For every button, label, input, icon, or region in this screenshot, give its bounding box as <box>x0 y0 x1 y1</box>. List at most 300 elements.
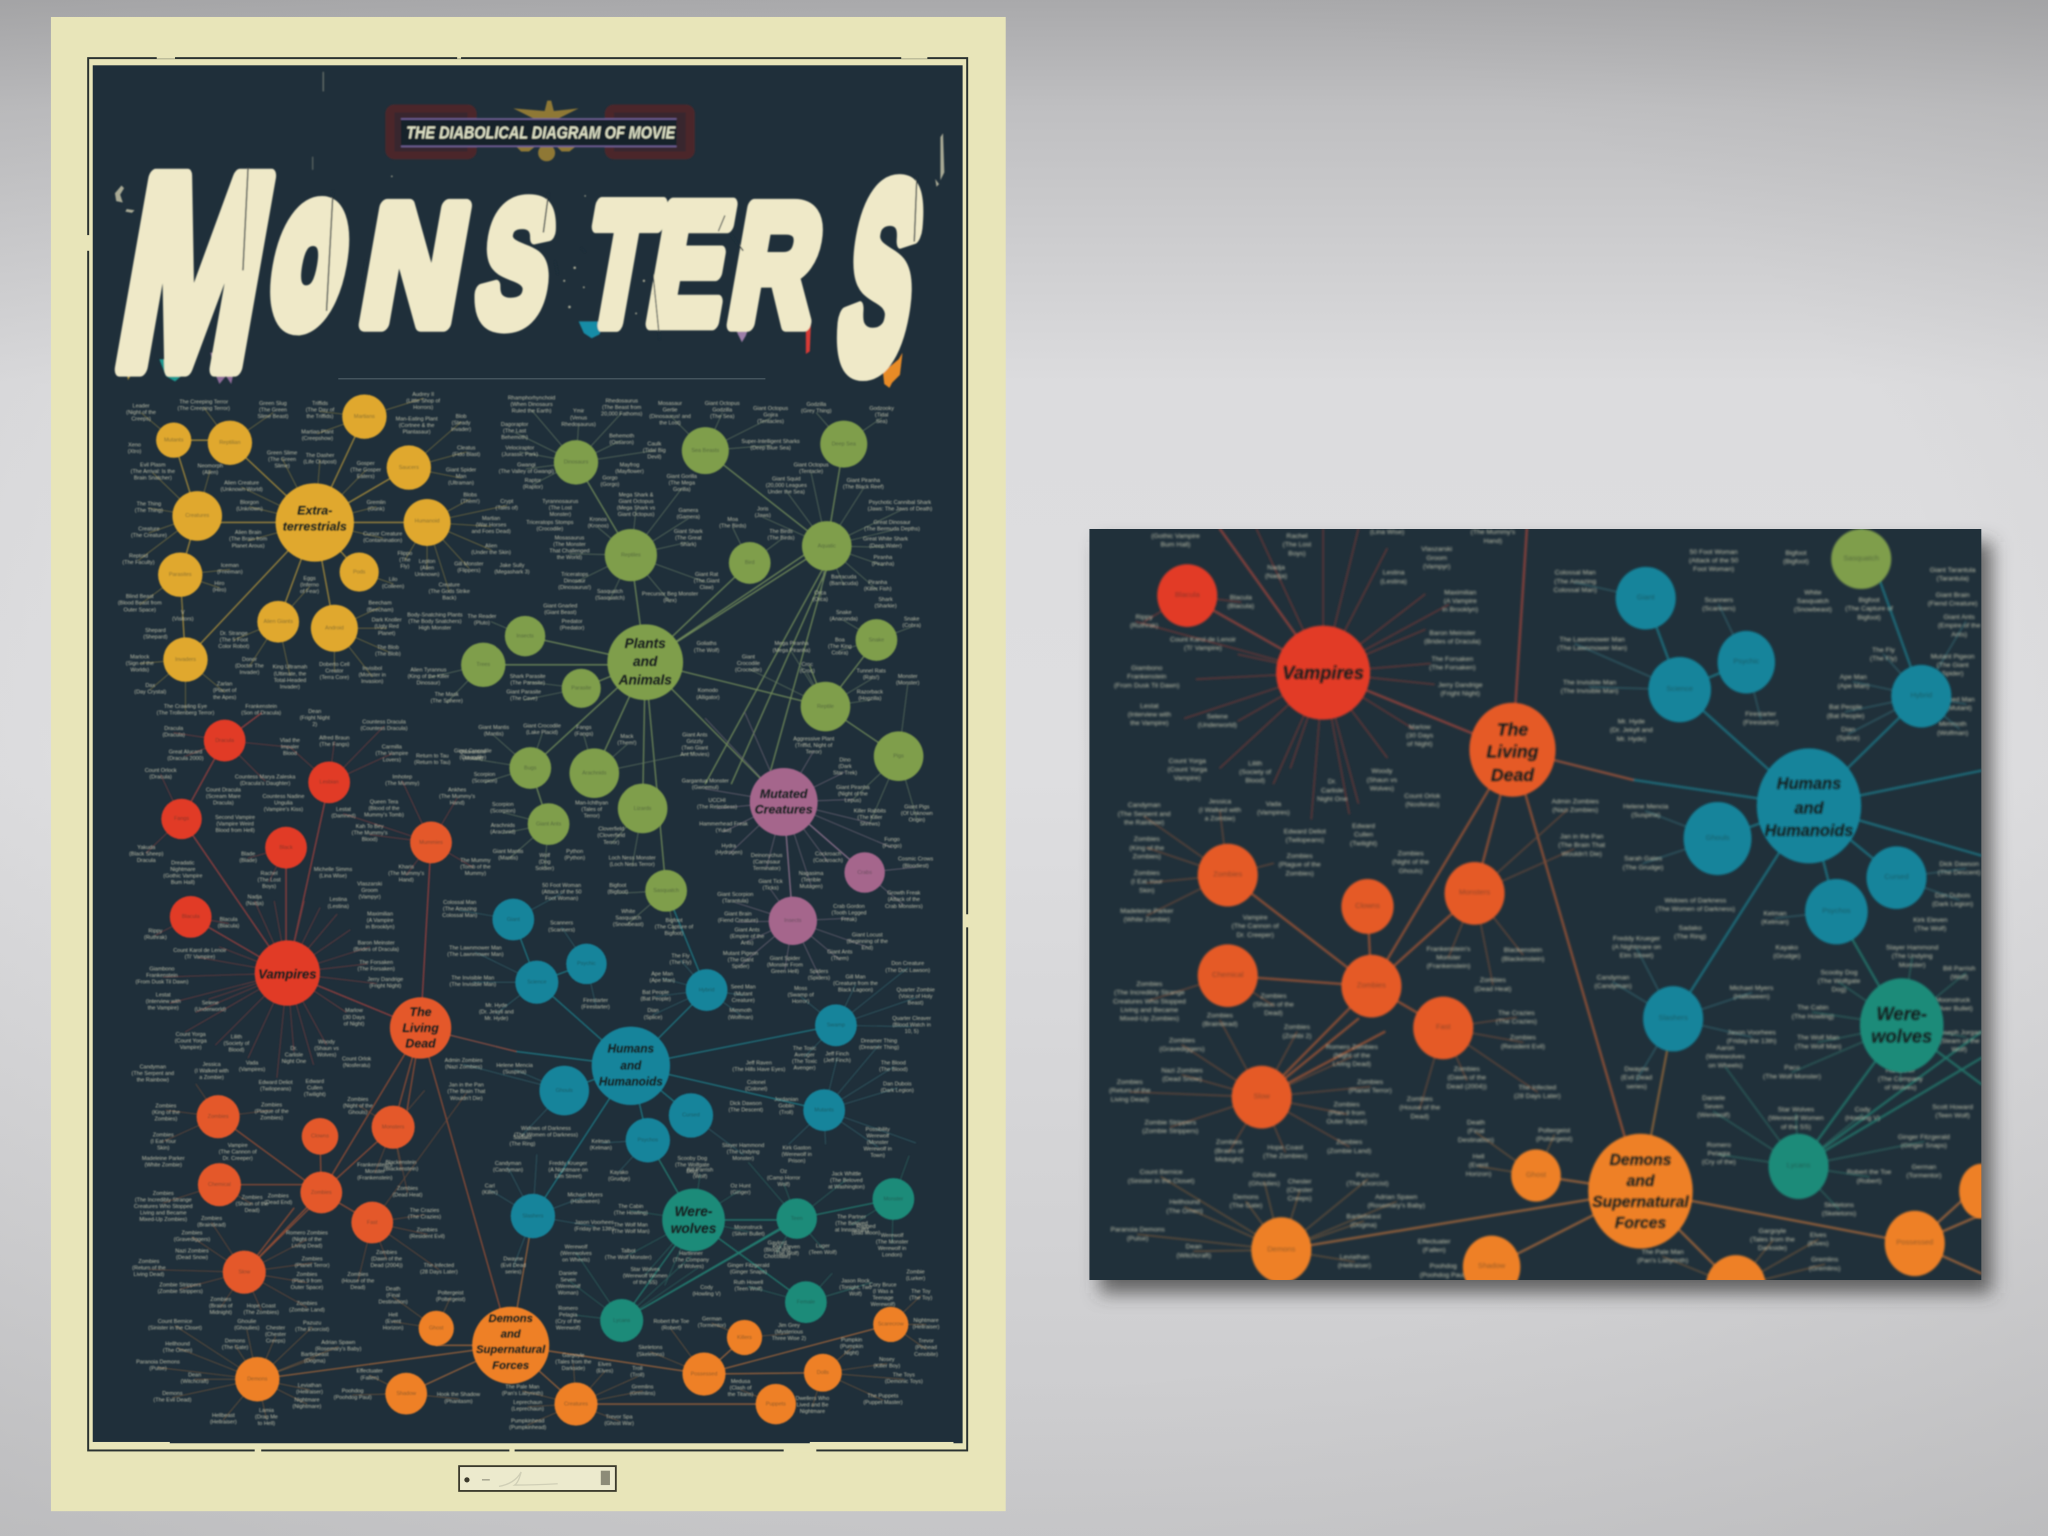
labels: plants and animals: Giant Spider <box>770 956 800 962</box>
detail labels: Zombies <box>1207 1012 1233 1019</box>
labels: plants and animals: (Croc) <box>800 669 815 675</box>
detail labels: Hellhound <box>1169 1199 1200 1206</box>
detail links: living dead <box>1129 788 1627 1153</box>
labels: plants and animals: (The Cave) <box>510 696 538 702</box>
labels: werewolves: (Werewolf Women <box>623 1273 668 1279</box>
labels: demons and supernatural forces: (Hellraiser) <box>296 1390 323 1396</box>
labels: werewolves: Daniele <box>559 1271 577 1277</box>
hub title: demons and supernatural forces <box>476 1313 546 1372</box>
labels: extra-terrestrials: (Cortnee & the <box>399 423 434 429</box>
labels: living dead: Zombies <box>296 1301 317 1307</box>
labels: vampires: Maximilian <box>367 912 393 918</box>
labels: vampires: Frankenstein <box>245 704 277 710</box>
labels: demons and supernatural forces: (Elves) <box>596 1369 613 1375</box>
labels: vampires: (The Mummy's <box>439 794 475 800</box>
labels: humans and humanoids: (Halloween) <box>571 1199 600 1205</box>
labels: humans and humanoids: (Creature from the <box>833 981 878 987</box>
detail labels: (I Walked with <box>1199 807 1241 814</box>
detail hub titles: Vampires <box>1282 662 1364 683</box>
labels: werewolves: Romero <box>558 1306 578 1312</box>
labels: plants and animals: Cloverfield <box>598 827 624 833</box>
labels: living dead: Zombies <box>268 1194 289 1200</box>
labels: humans and humanoids: Freddy Krueger <box>549 1161 587 1167</box>
detail labels: Candyman <box>1597 975 1629 982</box>
labels: living dead: Zombies) <box>154 1117 177 1123</box>
labels: extra-terrestrials: Donor <box>242 657 257 663</box>
labels: vampires: (Vampire Weird <box>216 821 254 827</box>
detail nodes: humans and humanoids: Giant <box>1637 593 1656 602</box>
detail labels: Sadako <box>1679 925 1702 932</box>
detail labels: (Society of <box>1239 769 1271 776</box>
nodes: werewolves: Lycans <box>613 1318 631 1324</box>
detail labels: (Zombie Land) <box>1327 1148 1371 1155</box>
title letters: O <box>263 181 356 349</box>
labels: humans and humanoids: Jeff Finch <box>825 1051 849 1057</box>
labels: plants and animals: Fungo <box>884 837 900 843</box>
labels: living dead: Ghouls) <box>348 1110 368 1116</box>
detail hub titles: wolves <box>1871 1025 1932 1046</box>
labels: plants and animals: Hammerhead Freak <box>699 821 748 827</box>
labels: humans and humanoids: (Scanners) <box>548 927 575 933</box>
labels: werewolves: at Innsmouth) <box>835 1228 868 1234</box>
labels: plants and animals: Scorpion <box>474 772 495 778</box>
links: werewolves <box>568 1140 909 1320</box>
nodes: werewolves <box>600 1178 914 1342</box>
nodes: extra-terrestrials: Mutants <box>164 437 184 443</box>
labels: extra-terrestrials: Reptoid <box>129 554 148 560</box>
labels: humans and humanoids: (Attack of the 50 <box>542 889 582 895</box>
labels: plants and animals: (Bigfoot) <box>607 889 628 895</box>
nodes: extra-terrestrials: Reptilian <box>219 440 241 446</box>
labels: plants and animals: Lepus) <box>845 798 861 804</box>
labels: plants and animals: Spiders <box>810 969 828 975</box>
detail labels: Ape Man <box>1840 674 1867 681</box>
labels: demons and supernatural forces: (Phantasm) <box>444 1399 473 1405</box>
detail labels: (White Zombie) <box>1124 917 1170 924</box>
labels: demons and supernatural forces: Trevor Spa <box>606 1414 633 1420</box>
nodes: demons and supernatural forces: Creatures <box>564 1401 588 1407</box>
labels: humans and humanoids: Monster) <box>732 1156 754 1162</box>
labels: werewolves: Jack Whittle <box>832 1172 861 1178</box>
labels: extra-terrestrials: Xeno <box>128 443 141 449</box>
labels: humans and humanoids: Bat People <box>642 990 669 996</box>
labels: extra-terrestrials: Creator <box>325 669 344 675</box>
labels: humans and humanoids: Don Creature <box>891 961 924 967</box>
labels: vampires: (Ti' Vampire) <box>185 955 215 961</box>
labels: extra-terrestrials: (Little Shop of <box>406 398 441 404</box>
detail labels: Ants) <box>1951 631 1967 638</box>
labels: vampires: (Brides of Dracula) <box>353 947 399 953</box>
detail nodes: living dead: Fast <box>1436 1022 1452 1031</box>
labels: vampires: Rachel <box>261 871 278 877</box>
labels: plants and animals: Giant Piranha <box>836 785 870 791</box>
labels: plants and animals: (Hogzilla) <box>858 696 882 702</box>
detail nodes: living dead <box>1198 703 1556 1128</box>
inset shadow <box>1100 542 1992 1293</box>
detail labels: The Crazies <box>1498 1010 1535 1017</box>
detail hub titles: Humanoids <box>1765 822 1853 840</box>
labels: plants and animals: (Tidal <box>875 413 888 419</box>
detail labels: Count Karol de Lenoir <box>1170 636 1236 643</box>
detail labels: (The Wolf) <box>1915 926 1946 933</box>
labels: werewolves: London) <box>882 1252 902 1258</box>
labels: extra-terrestrials: (The <box>399 558 411 564</box>
labels: plants and animals: Dinosaur <box>564 579 586 585</box>
labels: humans and humanoids: Mr. Hyde) <box>484 1016 508 1022</box>
detail labels: (Halloween) <box>1733 994 1770 1001</box>
labels: werewolves: (Werewolf <box>556 1284 581 1290</box>
labels: plants and animals: Shark Parasite <box>510 674 546 680</box>
labels: vampires: Kharis <box>398 865 414 871</box>
labels: plants and animals: Gorilla) <box>673 487 691 493</box>
detail labels: Candyman <box>1128 802 1161 809</box>
labels: plants and animals: Soldier) <box>535 866 554 872</box>
labels: werewolves: (Blood and <box>764 1247 790 1253</box>
labels: extra-terrestrials: (Terra Core) <box>320 675 349 681</box>
labels: humans and humanoids: Colonel <box>747 1080 766 1086</box>
detail labels: Scott Howard <box>1932 1104 1973 1111</box>
labels: vampires: (Dracula's Daughter) <box>240 781 290 787</box>
labels: vampires: Jessica <box>202 1062 221 1068</box>
labels: plants and animals: Dino <box>839 757 851 763</box>
labels: vampires: Impaler <box>281 744 299 750</box>
labels: vampires: Countess Nadine <box>262 794 304 800</box>
detail labels: (Kelman) <box>1761 919 1789 926</box>
labels: plants and animals: Shark <box>878 597 893 603</box>
detail labels: (Blacula) <box>1227 603 1254 610</box>
labels: humans and humanoids: Colossal Man <box>443 900 476 906</box>
detail labels: Wolf) <box>1951 1047 1967 1054</box>
labels: plants and animals: (Sasquatch) <box>595 596 625 602</box>
nodes: vampires: Black <box>279 845 293 851</box>
labels: extra-terrestrials: (The Creature) <box>131 533 167 539</box>
hub title: mutated creatures <box>755 787 813 817</box>
detail labels: (Shaun vs <box>1367 777 1398 784</box>
hub title: plants and animals: and <box>633 654 658 669</box>
detail labels: Vampire <box>1243 915 1268 922</box>
labels: plants and animals: Triceratops <box>561 572 588 578</box>
detail labels: Wolves) <box>1370 785 1394 792</box>
hub title: humans and humanoids: and <box>620 1060 642 1073</box>
labels: vampires: (Tomb of the <box>460 865 491 871</box>
nodes: plants and animals: Bird <box>745 560 755 566</box>
detail labels: Zombies <box>1334 1101 1360 1108</box>
labels: humans and humanoids: Beast) <box>908 1000 924 1006</box>
detail labels: (Ginger Snaps) <box>1901 1143 1947 1150</box>
labels: humans and humanoids: Michael Myers <box>568 1192 603 1198</box>
links: living dead <box>149 1028 511 1345</box>
labels: demons and supernatural forces: (Rosemary's Baby) <box>315 1347 362 1353</box>
detail labels: Zombies) <box>1285 870 1314 877</box>
labels: plants and animals: Orca <box>814 590 826 596</box>
labels: humans and humanoids: Horror) <box>792 999 809 1005</box>
labels: extra-terrestrials: Alien Brain <box>235 530 261 536</box>
nodes: vampires: Lesbian <box>320 780 339 786</box>
labels: extra-terrestrials: (Flippers) <box>457 568 481 574</box>
labels: vampires: the Rainbow) <box>137 1077 169 1083</box>
nodes: living dead: Monsters <box>382 1124 405 1130</box>
detail labels: Zombie Strippers <box>1144 1120 1196 1127</box>
labels: humans and humanoids: Mr. Hyde <box>485 1003 507 1009</box>
detail labels: Rippy <box>1135 614 1153 621</box>
detail labels: Zombies <box>1398 851 1424 858</box>
labels: plants and animals: (Jaws) <box>755 513 771 519</box>
detail labels: Vlaszarski <box>1421 546 1452 553</box>
labels: plants and animals: 20,000 Fathoms) <box>601 411 643 417</box>
labels: plants and animals: Rhamphorhynchoid <box>508 396 555 402</box>
labels: plants and animals: Bigfoot <box>609 883 626 889</box>
labels: humans and humanoids: The Fly <box>671 953 690 959</box>
detail nodes: humans and humanoids: Cursed <box>1884 872 1909 881</box>
labels: vampires: Lestat <box>336 807 351 813</box>
detail links: demons and supernatural forces <box>1138 1132 1981 1287</box>
labels: extra-terrestrials: Horrors) <box>413 405 433 411</box>
detail labels: Count Bernice <box>1140 1169 1183 1176</box>
labels: vampires: Hand) <box>399 878 414 884</box>
detail labels: Zombies <box>1136 981 1162 988</box>
detail labels: Zombies <box>1407 1096 1433 1103</box>
labels: humans and humanoids: (The Doc Lawson) <box>885 968 930 974</box>
labels: extra-terrestrials: Cursor Creature <box>363 532 402 538</box>
labels: plants and animals: Hydra <box>722 844 736 850</box>
nodes: humans and humanoids: Hybrid <box>699 987 715 993</box>
detail labels: Dr. <box>1328 779 1337 786</box>
labels: humans and humanoids: (Troll) <box>779 1110 793 1116</box>
labels: extra-terrestrials: (Pluto) <box>474 620 490 626</box>
detail labels: The Fly <box>1872 647 1895 654</box>
labels: plants and animals: Giant Ants <box>734 927 760 933</box>
labels: extra-terrestrials: (Ultraman) <box>448 481 474 487</box>
labels: living dead: (28 Days Later) <box>420 1269 458 1275</box>
labels: plants and animals: Super-Intelligent Sharks <box>741 439 800 445</box>
labels: extra-terrestrials: (Beecham) <box>367 607 394 613</box>
labels: humans and humanoids: (Mutant <box>734 991 753 997</box>
labels: demons and supernatural forces: Dean <box>188 1373 201 1379</box>
nodes: plants and animals: Pigs <box>893 754 904 760</box>
labels: extra-terrestrials: Audrey II <box>412 392 434 398</box>
labels: humans and humanoids: series) <box>505 1269 522 1275</box>
detail labels: Creeps) <box>1288 1196 1312 1203</box>
labels: plants and animals: (Tentacles) <box>757 419 784 425</box>
labels: plants and animals: (The Birds) <box>768 535 795 541</box>
labels: werewolves: Talbot <box>621 1249 636 1255</box>
labels: plants and animals: (Tales of <box>581 807 602 813</box>
detail labels: Dead) <box>1411 1113 1429 1120</box>
labels: extra-terrestrials: (The Day of <box>306 407 335 413</box>
labels: vampires: Carmilla <box>382 744 402 750</box>
detail hub titles: Demons <box>1610 1152 1672 1169</box>
labels: vampires: Bum Hall) <box>171 880 195 886</box>
labels: living dead: Zombies <box>155 1104 176 1110</box>
detail labels: of the SS) <box>1781 1124 1811 1131</box>
labels: humans and humanoids: The Invisible Man <box>451 976 494 982</box>
labels: demons and supernatural forces: (Drag Me <box>255 1414 278 1420</box>
labels: demons and supernatural forces: (Troll) <box>630 1373 645 1379</box>
labels: humans and humanoids: (Evil Dead <box>501 1263 526 1269</box>
labels: werewolves: The Partner <box>837 1215 866 1221</box>
labels: vampires: The Forsaken <box>359 960 393 966</box>
labels: humans and humanoids: Dwayne <box>503 1256 523 1262</box>
labels: vampires: Selene <box>202 1000 219 1006</box>
labels: plants and animals: Growth Freak <box>887 891 920 897</box>
labels: vampires: Dr. <box>290 1046 297 1052</box>
detail labels: (Gothic Vampire <box>1151 533 1200 540</box>
detail nodes: demons and supernatural forces: Possessed <box>1896 1238 1933 1247</box>
labels: plants and animals: Tunnel Rats <box>857 669 886 675</box>
labels: extra-terrestrials: Giant Spider <box>446 468 476 474</box>
detail labels: The Invisible Man <box>1563 679 1616 686</box>
labels: plants and animals: (Terrible <box>801 878 821 884</box>
labels: vampires: (Blade) <box>239 858 257 864</box>
labels: humans and humanoids: (Grudge) <box>608 1177 630 1183</box>
labels: humans and humanoids: Jason Voorhees <box>575 1220 614 1226</box>
labels: plants and animals: (Orca) <box>812 597 828 603</box>
labels: living dead: (The Cannon of <box>219 1149 257 1155</box>
labels: extra-terrestrials: (The Faculty) <box>122 560 155 566</box>
labels: plants and animals: Giant Scorpion <box>717 892 753 898</box>
detail labels: (Witchcraft) <box>1176 1252 1211 1259</box>
labels: plants and animals: Giant Ants <box>827 949 852 955</box>
detail labels: Zombies <box>1336 1139 1362 1146</box>
labels: extra-terrestrials: Brain Snatcher) <box>134 475 172 481</box>
labels: plants and animals: (Mantis) <box>484 731 504 737</box>
labels: vampires: (Count Yorga <box>175 1038 208 1044</box>
labels: humans and humanoids: Dreamer Thing <box>861 1038 897 1044</box>
detail labels: Scanners <box>1705 597 1733 604</box>
labels: extra-terrestrials: Color Robot) <box>218 644 249 650</box>
detail labels: Giant Ants <box>1944 614 1975 621</box>
labels: extra-terrestrials: (Planet of <box>213 688 237 694</box>
labels: humans and humanoids: (Candyman) <box>493 1168 523 1174</box>
labels: plants and animals: Snake <box>904 616 919 622</box>
labels: plants and animals: Mosasaur <box>658 401 682 407</box>
labels: humans and humanoids: 50 Foot Woman <box>542 883 581 889</box>
detail labels: Helene Mencia <box>1623 803 1668 810</box>
labels: humans and humanoids: Firestarter <box>583 998 608 1004</box>
labels: living dead: Zombies <box>347 1272 368 1278</box>
detail labels: Admin Zombies <box>1552 798 1599 805</box>
labels: humans and humanoids: (The Hills Have Eyes) <box>732 1067 785 1073</box>
labels: plants and animals: Giant Parasite <box>506 690 541 696</box>
labels: plants and animals: Giant Octopus <box>705 401 740 407</box>
labels: plants and animals: (Yuko) <box>716 828 732 834</box>
labels: demons and supernatural forces: (Tormentor) <box>698 1323 726 1329</box>
labels: vampires: Giambono <box>149 966 175 972</box>
hub title: the living dead: Living <box>402 1021 439 1035</box>
labels: extra-terrestrials: Planet) <box>378 631 395 637</box>
labels: plants and animals: (Dinosaurus!) <box>558 585 591 591</box>
labels: demons and supernatural forces: (Pan's Labyrinth) <box>502 1391 543 1397</box>
detail labels: (30 Days <box>1406 732 1434 739</box>
labels: demons and supernatural forces: (Event <box>385 1319 402 1325</box>
labels: plants and animals: Mega Piranha <box>774 641 809 647</box>
labels: extra-terrestrials: Evil Plasm <box>140 462 166 468</box>
labels: extra-terrestrials: Shepard <box>145 628 166 634</box>
labels: plants and animals: Nagasima <box>799 871 823 877</box>
labels: demons and supernatural forces: (The Toy) <box>909 1296 932 1302</box>
nodes: plants and animals: Reptile <box>817 704 834 710</box>
labels: plants and animals: Piranha <box>868 580 887 586</box>
hub title: the living dead: Dead <box>405 1037 436 1051</box>
detail nodes: humans and humanoids: Psychos <box>1822 906 1851 915</box>
labels: living dead: (Resident Evil) <box>409 1234 445 1240</box>
labels: plants and animals: Giant Gnarled <box>543 603 577 609</box>
labels: extra-terrestrials: (Visitors) <box>172 616 194 622</box>
detail labels: (28 Days Later) <box>1514 1093 1561 1100</box>
detail links: vampires <box>1136 529 1527 819</box>
labels: plants and animals: the Lost) <box>659 420 681 426</box>
labels: plants and animals: (The Black Reef) <box>843 484 884 490</box>
labels: plants and animals: Grizzly <box>686 739 703 745</box>
labels: living dead: Dead) <box>245 1208 260 1214</box>
detail labels: Gremlins <box>1811 1257 1838 1264</box>
detail node: green: Sasquatch <box>1843 553 1879 562</box>
labels: extra-terrestrials: Alien <box>485 543 497 549</box>
detail labels: The Cabin <box>1797 1005 1829 1012</box>
labels: plants and animals: (Anaconda) <box>830 616 858 622</box>
nodes: living dead: Slow <box>238 1269 250 1275</box>
hub title: demons and supernatural forces: Supernatural <box>476 1344 546 1356</box>
detail hub titles: Were- <box>1877 1003 1927 1024</box>
nodes: living dead: Chemical <box>208 1182 231 1188</box>
labels: humans and humanoids: (Dreamer Thing) <box>859 1045 899 1051</box>
labels: humans and humanoids: The Blood <box>881 1060 906 1066</box>
labels: extra-terrestrials: Planet Arous) <box>232 543 265 549</box>
labels: plants and animals: Ant Movies) <box>680 752 709 758</box>
labels: plants and animals: Claw) <box>700 585 714 591</box>
labels: plants and animals: (King of the Killer <box>408 674 449 680</box>
nodes: demons and supernatural forces: Demons <box>247 1377 268 1383</box>
labels: humans and humanoids: (Wolfman) <box>728 1015 753 1021</box>
labels: living dead: Zombies <box>182 1230 202 1236</box>
labels: demons and supernatural forces: (Demonic Toys) <box>885 1379 923 1385</box>
nodes: plants and animals: Trees <box>476 662 490 668</box>
detail labels: (A Nightmare on <box>1612 944 1661 951</box>
labels: plants and animals: Mega Shark & <box>619 492 653 498</box>
detail labels: Ghouls) <box>1399 868 1422 875</box>
labels: plants and animals: (The Sea) <box>710 414 735 420</box>
labels: plants and animals: Origin) <box>909 818 925 824</box>
detail labels: Moonstruck <box>1935 997 1970 1004</box>
labels: vampires: Queen Tera <box>370 799 398 805</box>
labels: extra-terrestrials: Crypt <box>500 499 513 505</box>
labels: demons and supernatural forces: (The Gate) <box>222 1345 248 1351</box>
detail nodes: demons and supernatural forces: Shadow <box>1478 1261 1506 1270</box>
nodes: mutated creatures: Crabs <box>857 870 872 876</box>
labels: extra-terrestrials: Zarlan <box>217 682 232 688</box>
nodes: humans and humanoids: Ghouls <box>556 1088 573 1094</box>
labels: plants and animals: Terminator) <box>753 866 781 872</box>
labels: werewolves: (The Beloved <box>830 1178 863 1184</box>
labels: extra-terrestrials: (Them!) <box>461 499 480 505</box>
labels: extra-terrestrials: King Ultramah <box>273 665 307 671</box>
labels: plants and animals: (The Wolf) <box>694 648 719 654</box>
detail labels: (Ti' Vampire) <box>1184 645 1222 652</box>
labels: vampires: (Lina Wise) <box>319 874 347 880</box>
detail nodes: demons and supernatural forces: Ghost <box>1526 1170 1547 1179</box>
labels: vampires: Night One <box>282 1059 306 1065</box>
nodes: extra-terrestrials: Parasites <box>169 572 192 578</box>
network: monster labels <box>118 392 940 1431</box>
detail labels: Dead (2004)) <box>1447 1083 1487 1090</box>
labels: plants and animals: Shark) <box>680 542 697 548</box>
labels: humans and humanoids: Seed Man <box>731 985 756 991</box>
labels: plants and animals: Godzooky <box>869 406 894 412</box>
labels: vampires: Rippy <box>148 929 162 935</box>
labels: living dead: Zombies <box>296 1272 317 1278</box>
labels: living dead: Zombies <box>201 1216 222 1222</box>
detail labels: Blacula <box>1230 595 1252 602</box>
